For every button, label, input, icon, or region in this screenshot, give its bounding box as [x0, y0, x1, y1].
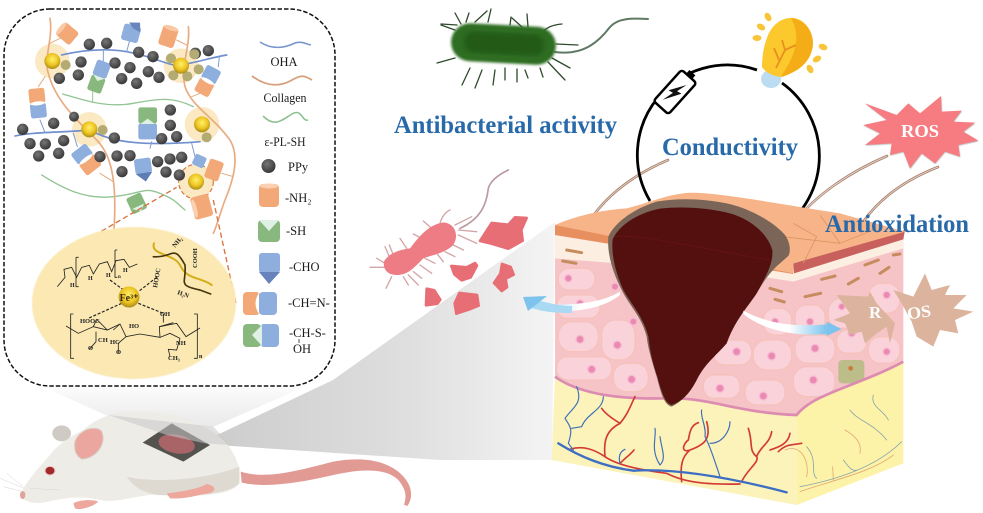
legend: e-PL-SH: ε-PL-SH — [264, 135, 306, 149]
legend: -CH-S-OH — [243, 324, 326, 356]
hairs — [593, 156, 938, 224]
ear — [75, 428, 103, 459]
legend: -CH=N-: -CH=N- — [288, 296, 330, 310]
dashed bonds — [88, 277, 163, 318]
chemical labels: H — [88, 276, 93, 282]
chemical labels: H — [70, 283, 75, 289]
legend: -NH2: -NH₂ — [285, 191, 312, 205]
implant patch — [143, 423, 210, 462]
blood vessels — [558, 387, 902, 492]
arrow: antioxidant release — [743, 311, 842, 336]
chemical labels: O — [116, 349, 121, 356]
collagen helix — [153, 243, 212, 294]
legend: OHA — [260, 42, 311, 69]
callout: Fe3+ coordination — [32, 227, 236, 379]
chemical labels: H — [106, 273, 111, 279]
legend: -SH — [258, 220, 306, 242]
icon: battery — [654, 66, 700, 114]
icon: ROS star — [863, 96, 978, 168]
light beam to panel — [28, 380, 320, 427]
epidermis edges — [555, 225, 793, 274]
panel: hydrogel network — [4, 9, 335, 386]
brown granules — [563, 250, 900, 302]
cylinders — [54, 21, 79, 46]
chemical labels — [70, 236, 203, 362]
Fe3+ ion — [118, 286, 140, 308]
icon: light bulb — [752, 12, 828, 88]
white upper layer — [555, 235, 903, 282]
chemical labels: HOOC — [152, 267, 162, 288]
bacterium body — [450, 22, 557, 66]
chemical labels: HO — [129, 323, 139, 330]
nuclei — [565, 275, 890, 400]
icon: green bacterium — [437, 9, 648, 88]
chemical labels: n — [118, 275, 121, 280]
panel border — [4, 9, 335, 386]
arrow: antibacterial tail — [532, 300, 572, 313]
yellow fat layer — [552, 377, 797, 505]
PPy balls — [17, 38, 214, 181]
legend: -CH-S-OH: OH — [293, 342, 311, 356]
chemical labels: CH — [98, 337, 108, 344]
legend: OHA: OHA — [270, 55, 298, 69]
chemical labels: O — [88, 345, 93, 352]
zoom dashed lines — [51, 187, 236, 303]
faded ROS star — [833, 273, 973, 347]
legend: PPy: PPy — [288, 160, 309, 174]
illustration: skin cross-section — [540, 193, 973, 505]
legend — [243, 42, 330, 356]
pink tail and pili — [370, 170, 508, 288]
eye — [45, 466, 55, 475]
heading: faded ROS text: R — [869, 303, 882, 322]
legend: Collagen: Collagen — [264, 91, 307, 105]
chemical labels: NH — [176, 340, 186, 347]
chemical labels: COOH — [192, 248, 199, 268]
network diagram — [15, 18, 236, 303]
whiskers — [0, 473, 60, 492]
heading: conductivity: Conductivity — [662, 134, 798, 161]
nose — [20, 491, 25, 499]
fragments — [426, 217, 527, 314]
legend: Collagen — [252, 76, 312, 105]
cell blobs — [557, 268, 900, 405]
heading: faded ROS text — [869, 301, 932, 323]
feet — [73, 500, 98, 509]
tail — [241, 459, 411, 506]
hydrogel dressing — [608, 199, 790, 407]
chemical labels: H — [123, 268, 128, 274]
Fe3+ ion: Fe³⁺ — [120, 293, 138, 304]
arrow: antibacterial release — [540, 292, 620, 311]
legend: -CH=N- — [243, 292, 330, 315]
mouse — [0, 411, 411, 509]
pink dermis layer — [555, 230, 903, 415]
icon: ROS star: ROS — [901, 121, 939, 141]
chemical labels: CH₃ — [168, 355, 180, 362]
heading: faded ROS text: OS — [906, 301, 932, 323]
epidermis top — [555, 193, 905, 273]
legend: -CHO: -CHO — [289, 260, 320, 274]
tail and pili — [437, 9, 648, 88]
heading: antibacterial activity: Antibacterial activity — [394, 112, 617, 139]
heading: antioxidation: Antioxidation — [825, 211, 969, 238]
magnification beam — [217, 222, 555, 460]
chemical labels: H₂N — [176, 289, 190, 300]
back ear — [52, 425, 71, 441]
legend: e-PL-SH — [263, 112, 308, 149]
polypyrrole — [57, 259, 137, 287]
arrow: antibacterial head — [523, 296, 547, 311]
illustration: dead bacterium fragments — [370, 170, 527, 314]
green cell — [838, 360, 864, 383]
chemical labels: n — [199, 354, 203, 360]
chemical labels: OH — [160, 311, 170, 318]
legend: -NH2 — [259, 184, 312, 207]
pink bacterium body — [384, 222, 456, 275]
chemical labels: HOOC — [80, 318, 100, 325]
legend: PPy — [262, 159, 309, 174]
legend: -SH: -SH — [286, 224, 306, 238]
chemical labels: HC — [110, 339, 120, 346]
legend: -CHO — [259, 253, 320, 284]
beam overlay — [108, 415, 230, 445]
circuit wire — [637, 65, 819, 229]
chemical labels: NH₂ — [171, 236, 184, 249]
body — [21, 411, 240, 503]
polysaccharide — [71, 314, 74, 358]
legend: -CH-S-OH: -CH-S- — [289, 326, 326, 340]
